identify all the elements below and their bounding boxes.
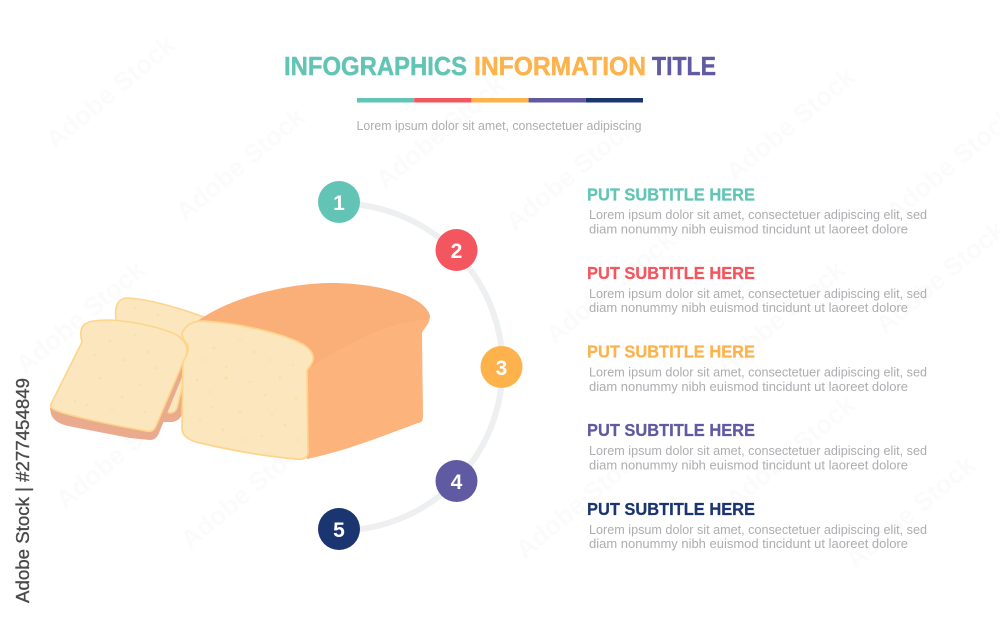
text block 2: diam nonummy nibh euismod tincidunt ut laoreet dolore [589, 300, 908, 315]
watermark: Adobe Stock [370, 69, 511, 195]
text block 1: Lorem ipsum dolor sit amet, consectetuer adipiscing elit, sed [589, 207, 927, 222]
loaf crust [195, 283, 430, 459]
step 2 marker [436, 229, 478, 271]
loaf top shading [195, 283, 430, 369]
step 2 marker: 2 [451, 240, 462, 263]
watermark: Adobe Stock [500, 111, 641, 237]
back slice crust [160, 370, 187, 422]
text block 3: PUT SUBTITLE HERE [587, 342, 755, 362]
watermark: Adobe Stock [175, 429, 316, 555]
middle slice crust [50, 350, 187, 440]
step 5 marker: 5 [333, 519, 345, 542]
title: TITLE [652, 51, 716, 81]
text block 3: Lorem ipsum dolor sit amet, consectetuer adipiscing elit, sed [589, 364, 927, 380]
text block 4 [587, 420, 927, 472]
step 3 marker: 3 [496, 357, 507, 380]
text block 1: diam nonummy nibh euismod tincidunt ut laoreet dolore [589, 222, 908, 236]
text block 5: diam nonummy nibh euismod tincidunt ut laoreet dolore [589, 536, 908, 551]
back bread slice [116, 298, 204, 413]
watermark: Adobe Stock [710, 254, 851, 380]
stock id vertical text: Adobe Stock | #277454849 [12, 378, 33, 603]
text block 4: diam nonummy nibh euismod tincidunt ut laoreet dolore [589, 458, 908, 472]
step 3 marker [480, 346, 522, 388]
step 1 marker: 1 [333, 192, 345, 215]
title [284, 51, 716, 81]
middle bread slice [51, 320, 187, 431]
title colour bar [357, 98, 643, 102]
loaf cut face [182, 321, 313, 459]
text block 2: PUT SUBTITLE HERE [587, 263, 755, 283]
step 5 marker [318, 508, 360, 550]
watermark: Adobe Stock [840, 449, 981, 575]
text block 3 [587, 342, 927, 394]
step 1 marker [318, 181, 360, 223]
text block 5: PUT SUBTITLE HERE [587, 499, 755, 519]
step 4 marker: 4 [451, 471, 463, 494]
watermark: Adobe Stock [720, 61, 861, 187]
text block 4: Lorem ipsum dolor sit amet, consectetuer adipiscing elit, sed [589, 443, 927, 458]
text block 1 [587, 184, 927, 236]
text block 4: PUT SUBTITLE HERE [587, 420, 755, 440]
watermark: Adobe Stock [510, 439, 651, 565]
text block 1: PUT SUBTITLE HERE [587, 184, 755, 204]
bread crumb texture [74, 307, 299, 441]
arc connector [339, 204, 502, 530]
text block 3: diam nonummy nibh euismod tincidunt ut laoreet dolore [589, 379, 908, 394]
title: INFORMATION [474, 51, 646, 81]
watermark: Adobe Stock [170, 101, 311, 227]
intro text: Lorem ipsum dolor sit amet, consectetuer adipiscing [356, 118, 642, 133]
text block 5 [587, 499, 927, 551]
illustration: bread [50, 283, 430, 459]
text block 2 [587, 263, 927, 315]
watermark: Adobe Stock [50, 389, 191, 515]
title: INFOGRAPHICS [284, 51, 467, 81]
text block 2: Lorem ipsum dolor sit amet, consectetuer adipiscing elit, sed [589, 286, 927, 301]
watermark: Adobe Stock [10, 254, 151, 380]
watermark: Adobe Stock [40, 29, 181, 155]
watermark: Adobe Stock [540, 224, 681, 350]
text block 5: Lorem ipsum dolor sit amet, consectetuer adipiscing elit, sed [589, 522, 927, 537]
step 4 marker [436, 460, 478, 502]
watermark: Adobe Stock [720, 389, 861, 515]
